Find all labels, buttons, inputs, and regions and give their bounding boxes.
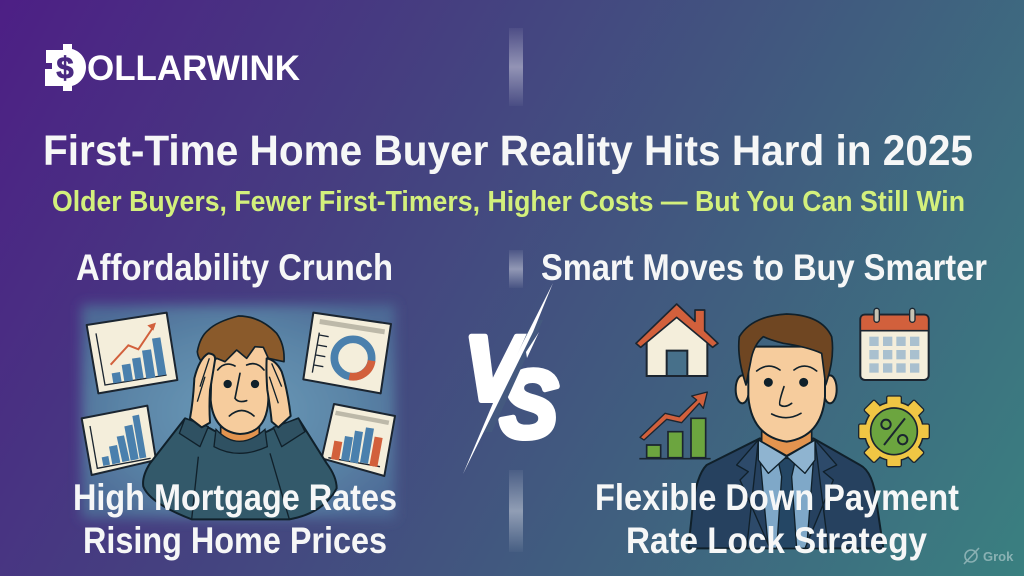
- subtitle: Older Buyers, Fewer First-Timers, Higher Costs — But You Can Still Win: [52, 186, 965, 218]
- panel: confident buyer illustration: [636, 304, 929, 548]
- person: neck: [221, 423, 259, 442]
- VS badge: S: [500, 351, 558, 458]
- panel glow: [82, 305, 395, 518]
- heading: affordability crunch: Affordability Crunch: [76, 247, 393, 288]
- icon: growth chart: [639, 392, 711, 459]
- person: shirt: [758, 440, 815, 548]
- watermark: Grok: Grok: [983, 549, 1014, 564]
- VS badge: [463, 283, 558, 474]
- person: sweater: [143, 418, 337, 519]
- person: face: [748, 347, 825, 442]
- person: sweater collar: [214, 429, 267, 453]
- chart card: donut: [303, 313, 391, 393]
- person: left hand: [190, 353, 215, 427]
- icon: house: [636, 304, 718, 376]
- person: expression: [757, 366, 817, 418]
- person: collar: [758, 440, 815, 473]
- person: tie: [777, 458, 797, 548]
- chart card: blue bars: [82, 406, 156, 475]
- watermark: Grok: [964, 548, 1014, 564]
- list: affordability factors: [73, 477, 397, 561]
- person: ears: [736, 375, 749, 403]
- person: neck: [762, 430, 812, 456]
- person: right hand: [266, 358, 291, 427]
- person: hair: [739, 314, 833, 385]
- person: lapels: [737, 440, 837, 548]
- panel: stressed buyer illustration: [82, 305, 395, 519]
- icon: dollar coin: $: [56, 50, 74, 85]
- person: expression: [218, 364, 264, 416]
- person: sweater cuffs: [179, 418, 305, 447]
- chart card: rising bars with arrow: [87, 313, 177, 393]
- list: smart moves: Rate Lock Strategy: [626, 520, 927, 561]
- person: suit: [688, 438, 883, 548]
- title: First-Time Home Buyer Reality Hits Hard in 2025: [43, 127, 973, 175]
- icon: dollar coin: [45, 44, 86, 91]
- list: affordability factors: High Mortgage Rates: [73, 477, 397, 518]
- icon: percent gear: [859, 396, 929, 467]
- logo: Dollarwink: [45, 44, 300, 91]
- list: affordability factors: Rising Home Prices: [83, 520, 387, 561]
- icon: calendar: [860, 308, 929, 380]
- list: smart moves: [595, 477, 959, 561]
- list: smart moves: Flexible Down Payment: [595, 477, 959, 518]
- chart card: red and blue bars: [322, 404, 395, 476]
- VS badge: V: [464, 318, 530, 420]
- logo wordmark: OLLARWINK: [87, 49, 300, 88]
- person: face: [211, 332, 268, 434]
- percent sign: [881, 418, 907, 445]
- person: hair: [197, 316, 284, 367]
